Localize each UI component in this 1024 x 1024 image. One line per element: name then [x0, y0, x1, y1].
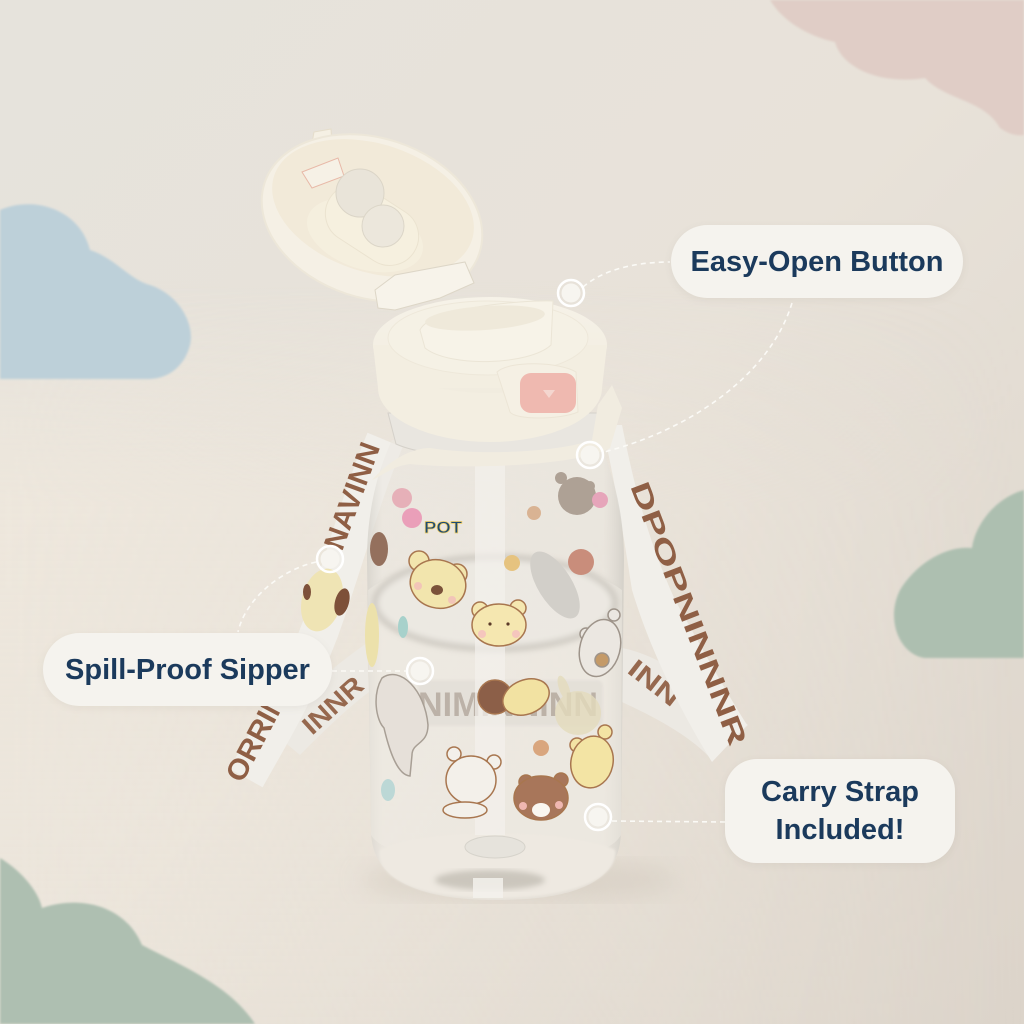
- sticker: rabbit: [376, 675, 428, 776]
- closed lid: [373, 297, 607, 442]
- open lid: [240, 107, 504, 329]
- cloud: blue left: [0, 204, 191, 379]
- label: Easy-Open Button: Easy-Open Button: [691, 246, 943, 278]
- label: Carry Strap Included!: [725, 759, 955, 863]
- sticker on ribbon: [294, 564, 350, 636]
- label: Easy-Open Button: [671, 225, 963, 298]
- cloud: green bottom left: [0, 858, 255, 1024]
- sticker: yellow bear centre: [472, 600, 526, 646]
- lid interior: [254, 115, 492, 301]
- callout dots: [317, 280, 611, 830]
- sticker: beige bunny: [555, 674, 601, 735]
- hinge: [375, 262, 474, 310]
- sticker: brown bear: [514, 773, 568, 820]
- cloud: pink top right: [770, 0, 1024, 135]
- straw: [475, 440, 505, 835]
- pink button: [497, 364, 578, 418]
- lid tab: [308, 129, 333, 165]
- strap: left ribbon: ORRINI: [220, 680, 297, 787]
- lid latch: [302, 158, 344, 188]
- bottle body: [367, 440, 624, 900]
- strap: back loops: [270, 643, 748, 760]
- refracted band: [418, 680, 603, 726]
- sticker: small flowers: [365, 492, 608, 801]
- bottle shadow: [360, 860, 680, 900]
- strap clip: [372, 385, 622, 480]
- strap: right ribbon: DPOPNINNNR: [624, 477, 753, 750]
- water: [368, 560, 622, 860]
- label: Carry Strap Included!: Included!: [776, 814, 904, 846]
- strap: left ribbon: [220, 438, 387, 787]
- label: Spill-Proof Sipper: [43, 633, 332, 706]
- sipper collar: [314, 173, 430, 277]
- sticker: grey bear top: [555, 472, 596, 515]
- sipper valve: [336, 169, 404, 247]
- spout: [420, 301, 553, 362]
- bear stickers: [365, 472, 627, 820]
- cloud: green right: [894, 490, 1024, 658]
- sticker: brown and yellow pair: [478, 672, 555, 722]
- strap: right ribbon: [602, 425, 753, 762]
- base: [380, 834, 615, 898]
- sticker: POT logo: POT: [424, 518, 463, 537]
- sticker: polar bear: [573, 609, 627, 681]
- bottle body: NIMINNINN: [418, 686, 598, 724]
- sticker: POT logo: [392, 488, 463, 537]
- strap: left ribbon: NAVINN: [319, 438, 387, 554]
- sticker: yellow bear lower right: [566, 725, 618, 792]
- sticker: white bear: [443, 747, 501, 818]
- bottle neck: [388, 413, 600, 458]
- sticker: yellow bear upper: [405, 551, 471, 614]
- strap: back loops: INNR: [296, 670, 370, 740]
- label: Spill-Proof Sipper: Spill-Proof Sipper: [65, 654, 310, 686]
- callout lines: [238, 262, 792, 822]
- label: Carry Strap Included!: Carry Strap: [761, 776, 919, 808]
- strap: back loops: INN: [622, 653, 686, 712]
- water surface ripple: [375, 557, 615, 649]
